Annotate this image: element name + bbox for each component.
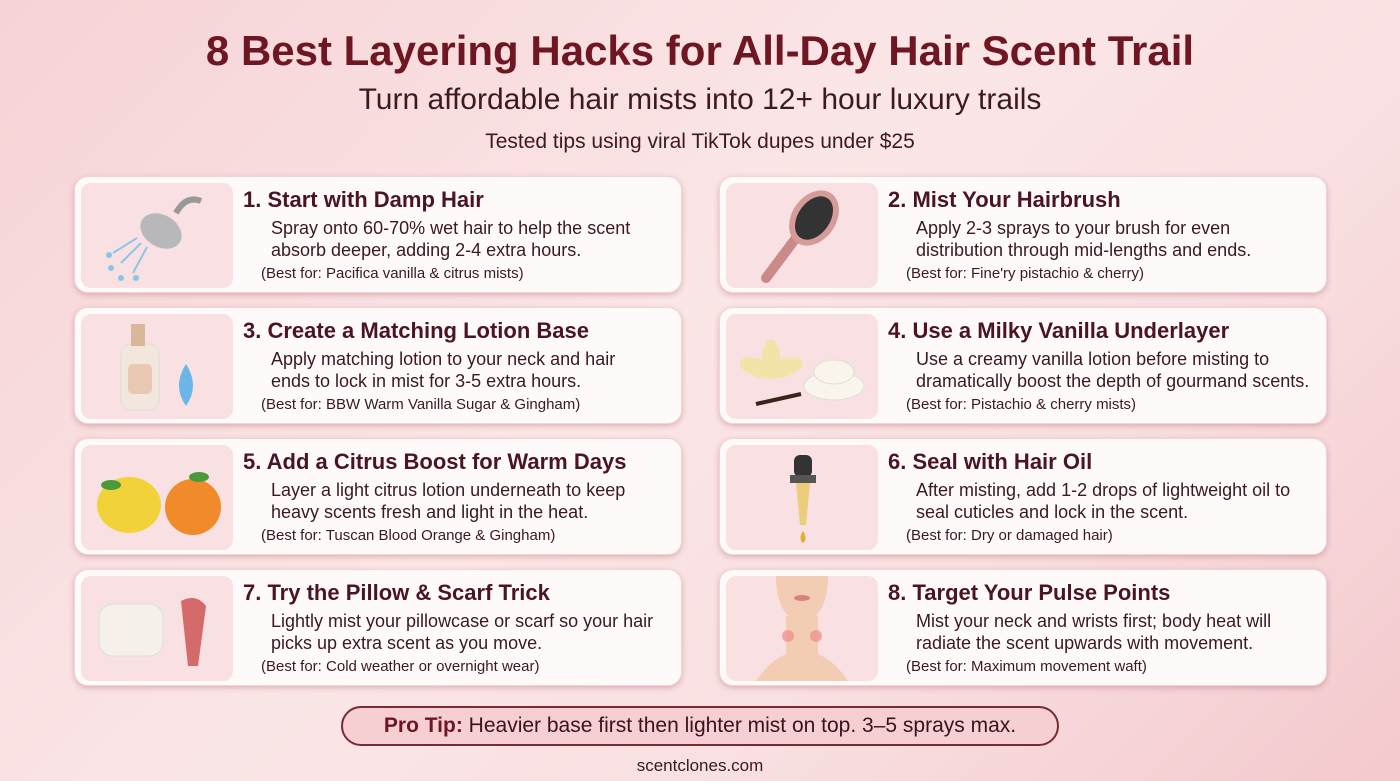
card 2: 2. Mist Your Hairbrush: [888, 187, 1121, 212]
card 1: Spray onto 60-70% wet hair to help the scent: [271, 218, 630, 238]
icon: neck pulse points: [726, 576, 878, 681]
card 7: picks up extra scent as you move.: [271, 633, 542, 653]
card 8: Mist your neck and wrists first; body heat will: [916, 611, 1271, 631]
card 3: ends to lock in mist for 3-5 extra hours.: [271, 371, 581, 391]
card 6: seal cuticles and lock in the scent.: [916, 502, 1188, 522]
card 8: [719, 569, 1327, 686]
card 7: (Best for: Cold weather or overnight wear): [261, 658, 539, 675]
icon: vanilla and cream: [726, 314, 878, 419]
card 2: [719, 176, 1327, 293]
card 5: Layer a light citrus lotion underneath to keep: [271, 480, 625, 500]
card 3: (Best for: BBW Warm Vanilla Sugar & Gingham): [261, 396, 580, 413]
icon: shower head: [81, 183, 233, 288]
card 4: 4. Use a Milky Vanilla Underlayer: [888, 318, 1229, 343]
icon: pillow and scarf: [81, 576, 233, 681]
card 8: (Best for: Maximum movement waft): [906, 658, 1147, 675]
card 2: distribution through mid-lengths and ends.: [916, 240, 1251, 260]
card 2: (Best for: Fine'ry pistachio & cherry): [906, 265, 1144, 282]
card 7: Lightly mist your pillowcase or scarf so your hair: [271, 611, 653, 631]
card 6: (Best for: Dry or damaged hair): [906, 527, 1113, 544]
pro tip callout: [341, 706, 1059, 746]
card 1: [74, 176, 682, 293]
card 5: [74, 438, 682, 555]
card 1: (Best for: Pacifica vanilla & citrus mists): [261, 265, 524, 282]
card 3: [74, 307, 682, 424]
card 7: [74, 569, 682, 686]
card 5: 5. Add a Citrus Boost for Warm Days: [243, 449, 626, 474]
card 4: dramatically boost the depth of gourmand scents.: [916, 371, 1309, 391]
card 8: 8. Target Your Pulse Points: [888, 580, 1170, 605]
card 1: absorb deeper, adding 2-4 extra hours.: [271, 240, 581, 260]
title: 8 Best Layering Hacks for All-Day Hair Scent Trail: [206, 27, 1194, 74]
subtitle: Turn affordable hair mists into 12+ hour luxury trails: [359, 83, 1041, 116]
card 2: Apply 2-3 sprays to your brush for even: [916, 218, 1230, 238]
card 6: [719, 438, 1327, 555]
card 4: [719, 307, 1327, 424]
card 4: (Best for: Pistachio & cherry mists): [906, 396, 1136, 413]
footer: scentclones.com: [637, 756, 763, 775]
card 7: 7. Try the Pillow & Scarf Trick: [243, 580, 550, 605]
card 4: Use a creamy vanilla lotion before misting to: [916, 349, 1269, 369]
card 5: heavy scents fresh and light in the heat.: [271, 502, 588, 522]
card 3: Apply matching lotion to your neck and hair: [271, 349, 615, 369]
card 6: After misting, add 1-2 drops of lightweight oil to: [916, 480, 1290, 500]
icon: lotion and drop: [81, 314, 233, 419]
card 1: 1. Start with Damp Hair: [243, 187, 484, 212]
pro tip callout: Pro Tip: Heavier base first then lighter mist on top. 3–5 sprays max.: [384, 714, 1016, 737]
card 5: (Best for: Tuscan Blood Orange & Gingham): [261, 527, 555, 544]
card 8: radiate the scent upwards with movement.: [916, 633, 1253, 653]
card 6: 6. Seal with Hair Oil: [888, 449, 1092, 474]
tagline: Tested tips using viral TikTok dupes under $25: [485, 130, 915, 153]
card 3: 3. Create a Matching Lotion Base: [243, 318, 589, 343]
icon: lemon and orange: [81, 445, 233, 550]
icon: hairbrush: [726, 183, 878, 288]
icon: oil dropper: [726, 445, 878, 550]
